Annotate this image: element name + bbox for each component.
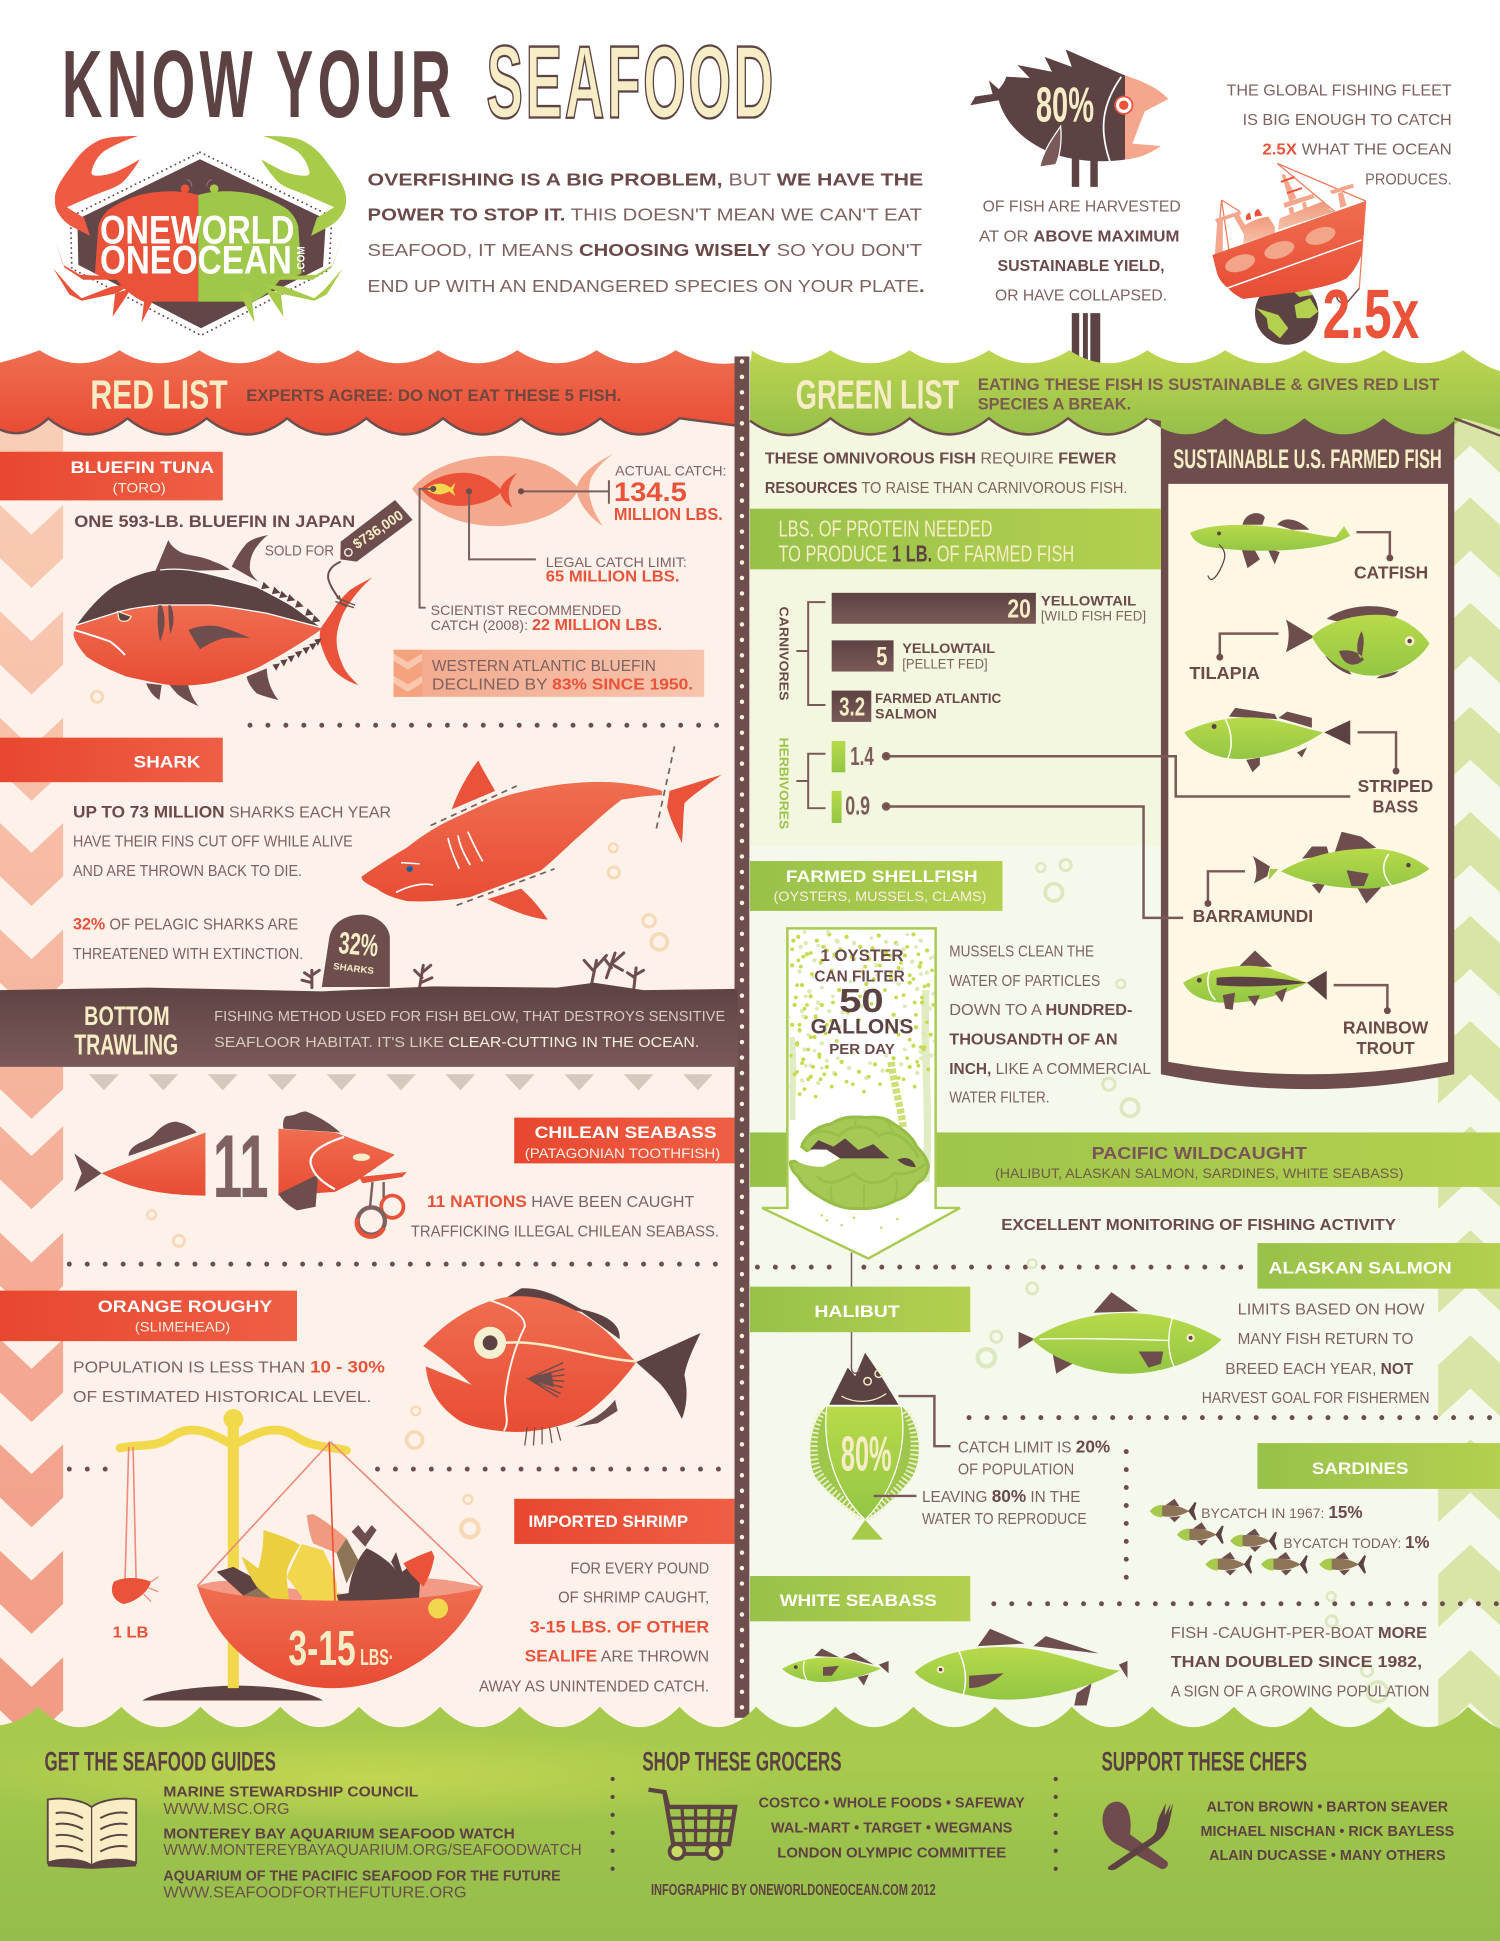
icon: rainbow trout bbox=[1183, 951, 1429, 1058]
label: alaskan salmon bbox=[1257, 1243, 1500, 1289]
icon: halibut fish: 80% bbox=[841, 1426, 892, 1481]
footer: grocers bbox=[642, 1746, 1025, 1899]
footer: seafood guides bbox=[45, 1746, 582, 1901]
icon: tombstone: SHARKS bbox=[333, 961, 374, 976]
label: bluefin tuna: BLUEFIN TUNA bbox=[71, 458, 214, 477]
icon: barramundi: BARRAMUNDI bbox=[1193, 906, 1313, 926]
icon: open book bbox=[48, 1799, 136, 1869]
panel: green list banner: GREEN LIST bbox=[796, 371, 959, 417]
bar chart: protein needed: 5 bbox=[876, 641, 887, 671]
text: fish harvested: SUSTAINABLE YIELD, bbox=[998, 258, 1165, 275]
text: global fishing fleet bbox=[1226, 82, 1452, 188]
text: alaskan salmon: MANY FISH RETURN TO bbox=[1238, 1331, 1413, 1348]
text: catch numbers bbox=[431, 463, 726, 634]
icon: rainbow trout: RAINBOW bbox=[1343, 1017, 1429, 1037]
footer: grocers: COSTCO • WHOLE FOODS • SAFEWAY bbox=[759, 1796, 1025, 1812]
text: white seabass: FISH -CAUGHT-PER-BOAT MORE bbox=[1171, 1625, 1427, 1642]
label: halibut: HALIBUT bbox=[814, 1302, 901, 1321]
panel: bottom trawling bbox=[0, 983, 738, 1067]
panel: bottom trawling: SEAFLOOR HABITAT. IT'S LIKE CLEAR-CUTTING IN THE OCEAN. bbox=[214, 1035, 699, 1051]
band: pacific wildcaught: (HALIBUT, ALASKAN SALMON, SARDINES, WHITE SEABASS) bbox=[995, 1166, 1403, 1181]
icon: alaskan salmon fish bbox=[978, 1259, 1222, 1374]
label: farmed shellfish bbox=[750, 861, 1002, 911]
icon: rainbow trout: TROUT bbox=[1356, 1038, 1415, 1058]
icon: bycatch scale: LBS· bbox=[360, 1644, 394, 1670]
label: bluefin tuna: (TORO) bbox=[113, 481, 166, 497]
text: shark facts: 32% OF PELAGIC SHARKS ARE bbox=[73, 914, 298, 933]
icon: chilean seabass fish with 11 bbox=[74, 1111, 407, 1246]
icon: price tag bbox=[328, 500, 413, 599]
icon: bycatch scale bbox=[112, 1409, 483, 1701]
panel: green list banner: EATING THESE FISH IS SUSTAINABLE & GIVES RED LIST bbox=[978, 375, 1440, 394]
footer: seafood guides: WWW.MONTEREYBAYAQUARIUM.ORG/SEAFOODWATCH bbox=[163, 1842, 582, 1859]
text: global fishing fleet: IS BIG ENOUGH TO CATCH bbox=[1243, 112, 1452, 129]
label: sardines: SARDINES bbox=[1312, 1459, 1408, 1478]
text: mussels: DOWN TO A HUNDRED- bbox=[949, 1002, 1132, 1019]
intro paragraph: END UP WITH AN ENDANGERED SPECIES ON YOUR PLATE . bbox=[368, 276, 925, 296]
text: bluefin sold: ONE 593-LB. BLUEFIN IN JAPAN bbox=[74, 512, 355, 531]
panel: bottom trawling: BOTTOM bbox=[84, 1000, 170, 1031]
band: pacific wildcaught bbox=[750, 1132, 1500, 1187]
text: orange roughy: OF ESTIMATED HISTORICAL LEVEL. bbox=[73, 1389, 371, 1406]
text: omnivorous fish: THESE OMNIVOROUS FISH REQUIRE FEWER bbox=[765, 450, 1116, 467]
callout: oyster filter arrow: 1 OYSTER bbox=[821, 946, 903, 965]
bar chart: protein needed: YELLOWTAIL bbox=[1041, 594, 1136, 610]
left chevron column bbox=[0, 399, 63, 1740]
logo: crab badge: .COM bbox=[295, 246, 307, 272]
text: trafficking bbox=[411, 1192, 719, 1240]
icon: 80% fish on poles bbox=[970, 50, 1168, 363]
text: halibut: CATCH LIMIT IS 20% bbox=[958, 1437, 1110, 1457]
icon: fishing boat and earth: 2.5x bbox=[1323, 275, 1420, 353]
text: catch numbers: ACTUAL CATCH: bbox=[615, 463, 726, 479]
text: fish harvested: AT OR ABOVE MAXIMUM bbox=[979, 228, 1179, 245]
panel: bottom trawling: FISHING METHOD USED FOR FISH BELOW, THAT DESTROYS SENSITIVE bbox=[214, 1009, 725, 1025]
right panel background bbox=[750, 415, 1500, 1733]
bar chart: protein needed: 20 bbox=[1007, 594, 1031, 624]
divider dots behind scale bbox=[69, 1467, 725, 1471]
text: shrimp: OF SHRIMP CAUGHT, bbox=[558, 1590, 709, 1607]
title: KNOW YOUR bbox=[62, 32, 455, 138]
text: shrimp: SEALIFE ARE THROWN bbox=[525, 1646, 709, 1665]
icon: shark bbox=[361, 746, 722, 950]
label: halibut bbox=[750, 1287, 970, 1332]
text: mussels: INCH, LIKE A COMMERCIAL bbox=[949, 1061, 1151, 1078]
callout: oyster filter arrow: PER DAY bbox=[829, 1042, 895, 1058]
icon: oyster shell bbox=[791, 1117, 928, 1209]
intro paragraph: SEAFOOD, IT MEANS CHOOSING WISELY SO YOU DON'T bbox=[368, 240, 923, 260]
callout: western atlantic bluefin: DECLINED BY 83% SINCE 1950. bbox=[432, 675, 693, 693]
text: catch numbers: CATCH (2008): 22 MILLION LBS. bbox=[431, 616, 662, 634]
callout: western atlantic bluefin: WESTERN ATLANTIC BLUEFIN bbox=[432, 658, 656, 675]
label: orange roughy: (SLIMEHEAD) bbox=[135, 1319, 230, 1335]
footer: chefs: ALAIN DUCASSE • MANY OTHERS bbox=[1209, 1848, 1446, 1864]
center dotted divider bbox=[735, 356, 749, 1718]
text: catch numbers: LEGAL CATCH LIMIT: bbox=[546, 555, 687, 571]
callout: oyster filter arrow: 50 bbox=[839, 983, 884, 1020]
icon: bycatch scale: 3-15 bbox=[288, 1621, 356, 1676]
bar chart: protein needed bbox=[777, 593, 1146, 830]
intro paragraph bbox=[368, 170, 925, 296]
footer: chefs: MICHAEL NISCHAN • RICK BAYLESS bbox=[1200, 1824, 1454, 1840]
text: global fishing fleet: THE GLOBAL FISHING FLEET bbox=[1226, 82, 1452, 99]
text: halibut: LEAVING 80% IN THE bbox=[922, 1486, 1080, 1506]
text: halibut bbox=[922, 1437, 1110, 1528]
icon: orange roughy fish bbox=[407, 1288, 700, 1537]
bar chart: protein needed: [WILD FISH FED] bbox=[1041, 608, 1146, 623]
icon: tombstone bbox=[322, 915, 390, 987]
panel: footer wave bbox=[0, 1707, 1500, 1941]
bar chart: protein needed: SALMON bbox=[875, 706, 937, 721]
label: white seabass bbox=[750, 1576, 970, 1621]
bar chart: protein needed: YELLOWTAIL bbox=[902, 641, 995, 657]
logo: crab badge: ONEOCEAN bbox=[100, 238, 292, 282]
bar chart: protein needed: 3.2 bbox=[839, 691, 865, 721]
icon: tilapia bbox=[1189, 606, 1429, 683]
text: white seabass bbox=[1171, 1625, 1429, 1700]
label: farmed shellfish: FARMED SHELLFISH bbox=[786, 867, 978, 886]
icon: spoon and fork bbox=[1103, 1802, 1173, 1870]
icon: tilapia: TILAPIA bbox=[1189, 663, 1260, 683]
icon: shopping cart bbox=[649, 1790, 735, 1859]
footer: seafood guides: GET THE SEAFOOD GUIDES bbox=[45, 1746, 276, 1777]
connector lines to farmed fish bbox=[883, 753, 1350, 918]
logo: crab badge bbox=[53, 136, 346, 335]
text: omnivorous fish: RESOURCES TO RAISE THAN CARNIVOROUS FISH. bbox=[765, 480, 1127, 497]
intro paragraph: OVERFISHING IS A BIG PROBLEM, BUT WE HAVE THE bbox=[368, 170, 923, 190]
panel: red list banner: EXPERTS AGREE: DO NOT EAT THESE 5 FISH. bbox=[246, 386, 621, 405]
bar chart: protein needed: FARMED ATLANTIC bbox=[875, 691, 1001, 706]
label: chilean seabass: CHILEAN SEABASS bbox=[535, 1123, 717, 1142]
label: imported shrimp bbox=[514, 1499, 735, 1544]
text: shrimp: AWAY AS UNINTENDED CATCH. bbox=[479, 1678, 709, 1695]
text: alaskan salmon: BREED EACH YEAR, NOT bbox=[1225, 1361, 1414, 1378]
callout: oyster filter arrow bbox=[762, 926, 960, 1258]
icon: white seabass fish pair bbox=[782, 1629, 1127, 1705]
text: catch numbers: MILLION LBS. bbox=[614, 504, 723, 524]
text: bluefin sold: SOLD FOR bbox=[265, 544, 334, 560]
text: omnivorous fish bbox=[765, 450, 1127, 497]
icon: barramundi bbox=[1193, 832, 1429, 926]
panel: red list banner bbox=[0, 350, 738, 434]
text: mussels: MUSSELS CLEAN THE bbox=[949, 943, 1094, 960]
text: mussels bbox=[949, 943, 1151, 1107]
text: white seabass: A SIGN OF A GROWING POPULATION bbox=[1171, 1683, 1429, 1700]
text: mussels: WATER FILTER. bbox=[949, 1090, 1050, 1107]
label: farmed shellfish: (OYSTERS, MUSSELS, CLAMS) bbox=[774, 889, 986, 905]
heading: protein chart bbox=[750, 509, 1161, 569]
text: orange roughy: POPULATION IS LESS THAN 10 - 30% bbox=[73, 1358, 385, 1377]
footer: seafood guides: WWW.SEAFOODFORTHEFUTURE.ORG bbox=[163, 1884, 467, 1901]
panel: green list banner bbox=[750, 350, 1500, 436]
icon: catfish bbox=[1190, 513, 1428, 582]
icon: striped bass bbox=[1184, 708, 1433, 817]
text: shrimp bbox=[479, 1560, 709, 1695]
footer: chefs: SUPPORT THESE CHEFS bbox=[1101, 1746, 1307, 1777]
heading: protein chart: LBS. OF PROTEIN NEEDED bbox=[778, 515, 993, 541]
text: bycatch: BYCATCH TODAY: 1% bbox=[1283, 1532, 1429, 1552]
heading: excellent monitoring: EXCELLENT MONITORING OF FISHING ACTIVITY bbox=[1001, 1216, 1396, 1234]
text: catch numbers: SCIENTIST RECOMMENDED bbox=[431, 603, 621, 619]
panel: bottom trawling: TRAWLING bbox=[74, 1029, 178, 1061]
bar chart: protein needed: HERBIVORES bbox=[777, 738, 792, 830]
bar chart: protein needed: CARNIVORES bbox=[777, 606, 792, 701]
right chevron column bbox=[1438, 392, 1500, 1733]
text: shark facts bbox=[73, 802, 391, 963]
heading: protein chart: TO PRODUCE 1 LB. OF FARMED FISH bbox=[778, 540, 1074, 566]
icon: sardines bbox=[1150, 1499, 1365, 1576]
icon: catfish: CATFISH bbox=[1354, 562, 1428, 582]
label: imported shrimp: IMPORTED SHRIMP bbox=[528, 1512, 688, 1531]
text: bycatch bbox=[1201, 1502, 1429, 1552]
text: global fishing fleet: 2.5X WHAT THE OCEAN bbox=[1262, 142, 1452, 159]
callout: western atlantic bluefin bbox=[394, 650, 704, 697]
label: shark: SHARK bbox=[134, 752, 200, 771]
text: trafficking: 11 NATIONS HAVE BEEN CAUGHT bbox=[427, 1192, 695, 1211]
icon: striped bass: BASS bbox=[1373, 797, 1418, 817]
intro paragraph: POWER TO STOP IT. THIS DOESN'T MEAN WE CAN'T EAT bbox=[368, 204, 923, 224]
label: orange roughy bbox=[0, 1291, 297, 1341]
icon: corals bbox=[302, 953, 644, 990]
text: halibut: OF POPULATION bbox=[958, 1461, 1074, 1478]
footer: seafood guides: MARINE STEWARDSHIP COUNCIL bbox=[163, 1785, 418, 1801]
text: shark facts: THREATENED WITH EXTINCTION. bbox=[73, 946, 303, 963]
text: global fishing fleet: PRODUCES. bbox=[1365, 171, 1452, 188]
text: fish harvested: OR HAVE COLLAPSED. bbox=[995, 288, 1167, 305]
icon: chilean seabass fish with 11: 11 bbox=[213, 1116, 269, 1216]
footer: seafood guides: WWW.MSC.ORG bbox=[163, 1801, 290, 1818]
icon: halibut fish bbox=[810, 1353, 950, 1540]
text: trafficking: TRAFFICKING ILLEGAL CHILEAN SEABASS. bbox=[411, 1223, 719, 1240]
bar chart: protein needed: 1.4 bbox=[850, 741, 874, 771]
icon: tombstone: 32% bbox=[337, 925, 380, 963]
title: SEAFOOD bbox=[486, 25, 776, 140]
callout: oyster filter arrow: GALLONS bbox=[811, 1016, 913, 1039]
text: orange roughy bbox=[73, 1358, 385, 1406]
bar chart: protein needed: 0.9 bbox=[845, 790, 870, 820]
icon: bluefin tuna fish bbox=[73, 535, 372, 706]
footer: chefs bbox=[1101, 1746, 1454, 1864]
panel: green list banner: SPECIES A BREAK. bbox=[978, 395, 1131, 414]
label: sardines bbox=[1257, 1443, 1500, 1489]
text: fish harvested bbox=[979, 199, 1181, 305]
text: alaskan salmon: LIMITS BASED ON HOW bbox=[1238, 1301, 1425, 1318]
label: orange roughy: ORANGE ROUGHY bbox=[98, 1297, 272, 1316]
chart: nested catch fish bbox=[412, 454, 613, 608]
panel: farmed fish banner frame bbox=[1161, 415, 1454, 1089]
label: bluefin tuna bbox=[0, 452, 223, 500]
icon: 80% fish on poles: 80% bbox=[1036, 77, 1094, 132]
footer: seafood guides: MONTEREY BAY AQUARIUM SEAFOOD WATCH bbox=[163, 1826, 515, 1842]
icon: bycatch scale: 1 LB bbox=[113, 1623, 149, 1641]
footer: grocers: SHOP THESE GROCERS bbox=[642, 1746, 842, 1777]
footer: grocers: LONDON OLYMPIC COMMITTEE bbox=[777, 1845, 1006, 1861]
text: shrimp: FOR EVERY POUND bbox=[571, 1560, 709, 1577]
label: chilean seabass: (PATAGONIAN TOOTHFISH) bbox=[525, 1146, 720, 1162]
label: white seabass: WHITE SEABASS bbox=[780, 1591, 937, 1610]
footer: chefs: ALTON BROWN • BARTON SEAVER bbox=[1207, 1800, 1448, 1816]
text: alaskan salmon: HARVEST GOAL FOR FISHERMEN bbox=[1202, 1390, 1429, 1407]
left panel background bbox=[0, 415, 738, 1733]
text: bluefin sold bbox=[74, 512, 355, 560]
text: shark facts: UP TO 73 MILLION SHARKS EACH YEAR bbox=[73, 802, 391, 821]
icon: striped bass: STRIPED bbox=[1358, 776, 1433, 796]
label: alaskan salmon: ALASKAN SALMON bbox=[1269, 1258, 1452, 1277]
icon: price tag: $736,000 bbox=[350, 508, 407, 553]
text: mussels: THOUSANDTH OF AN bbox=[949, 1032, 1118, 1049]
text: shark facts: AND ARE THROWN BACK TO DIE. bbox=[73, 863, 302, 880]
text: catch numbers: 65 MILLION LBS. bbox=[546, 568, 679, 586]
label: chilean seabass bbox=[514, 1118, 735, 1163]
text: alaskan salmon bbox=[1202, 1301, 1429, 1407]
text: catch numbers: 134.5 bbox=[614, 476, 687, 507]
text: halibut: WATER TO REPRODUCE bbox=[922, 1511, 1087, 1528]
text: fish harvested: OF FISH ARE HARVESTED bbox=[983, 199, 1181, 216]
text: mussels: WATER OF PARTICLES bbox=[949, 973, 1100, 990]
bar chart: protein needed: [PELLET FED] bbox=[902, 656, 988, 671]
panel: red list banner: RED LIST bbox=[90, 371, 228, 417]
footer: grocers: WAL-MART • TARGET • WEGMANS bbox=[771, 1821, 1012, 1837]
text: bycatch: BYCATCH IN 1967: 15% bbox=[1201, 1502, 1363, 1522]
callout: oyster filter arrow: CAN FILTER bbox=[814, 967, 905, 985]
icon: fishing boat and earth bbox=[1212, 163, 1420, 353]
footer: grocers: INFOGRAPHIC BY ONEWORLDONEOCEAN.COM 2012 bbox=[651, 1882, 936, 1899]
footer: seafood guides: AQUARIUM OF THE PACIFIC SEAFOOD FOR THE FUTURE bbox=[163, 1868, 561, 1884]
label: shark bbox=[0, 738, 223, 782]
text: shark facts: HAVE THEIR FINS CUT OFF WHILE ALIVE bbox=[73, 834, 353, 851]
band: pacific wildcaught: PACIFIC WILDCAUGHT bbox=[1092, 1143, 1307, 1163]
text: white seabass: THAN DOUBLED SINCE 1982, bbox=[1171, 1654, 1422, 1671]
text: shrimp: 3-15 LBS. OF OTHER bbox=[530, 1617, 709, 1636]
logo: crab badge: ONEWORLD bbox=[100, 208, 294, 252]
